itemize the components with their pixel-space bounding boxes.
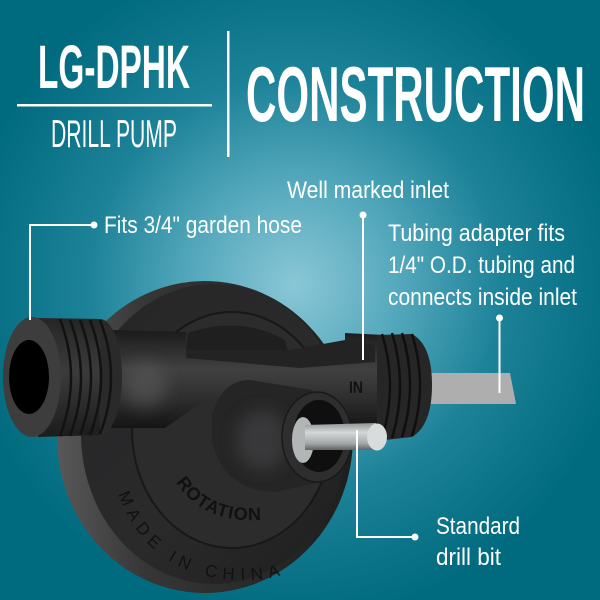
collar opening xyxy=(293,400,345,472)
housing neck xyxy=(212,380,330,492)
model number: LG-DPHK xyxy=(38,33,190,101)
callout: tubing adapter xyxy=(388,220,577,393)
callout text: connects inside inlet xyxy=(388,284,577,311)
callout: garden hose xyxy=(30,212,302,320)
drill shaft xyxy=(305,423,376,450)
leader dot xyxy=(412,534,418,540)
callout text: Fits 3/4" garden hose xyxy=(104,212,302,239)
drill shaft tip xyxy=(367,424,387,450)
product type: DRILL PUMP xyxy=(51,113,177,156)
right inlet thread xyxy=(377,333,432,440)
hub relief xyxy=(132,312,332,548)
callout text xyxy=(388,220,577,311)
vertical divider xyxy=(227,31,230,157)
silver bushing xyxy=(292,417,314,463)
heading block: model name xyxy=(17,33,212,156)
disc inner face xyxy=(81,284,347,584)
leader line xyxy=(498,318,500,393)
left hose thread xyxy=(38,318,122,437)
made in china marking: MADE IN CHINA xyxy=(118,491,280,580)
callout text: drill bit xyxy=(436,544,501,571)
left inlet face xyxy=(3,317,61,437)
heading rule xyxy=(17,104,212,106)
back shoulder xyxy=(185,325,290,360)
leader line xyxy=(362,215,364,360)
tubing adapter strip xyxy=(430,373,516,404)
leader line xyxy=(30,225,94,320)
leader line xyxy=(357,430,415,537)
callout: drill bit xyxy=(357,430,520,571)
main tube body xyxy=(110,330,385,428)
leader dot xyxy=(360,212,366,218)
left tube highlight xyxy=(123,363,167,407)
left inlet bore xyxy=(9,340,49,414)
callout text: Tubing adapter fits xyxy=(388,220,565,247)
neck highlight xyxy=(236,410,288,470)
rotation marking: ROTATION xyxy=(176,476,260,520)
inlet marking: IN xyxy=(349,378,363,397)
callout text: Standard xyxy=(436,513,520,540)
callout text: 1/4" O.D. tubing and xyxy=(388,252,575,279)
pump illustration xyxy=(3,281,432,593)
callout text: Well marked inlet xyxy=(287,177,449,204)
upper body bar xyxy=(186,340,375,368)
drill collar xyxy=(282,392,352,482)
callout: marked inlet xyxy=(287,177,449,360)
leader dot xyxy=(496,314,503,322)
pump disc xyxy=(57,281,353,593)
leader dot xyxy=(90,222,98,228)
callout text xyxy=(436,513,520,571)
